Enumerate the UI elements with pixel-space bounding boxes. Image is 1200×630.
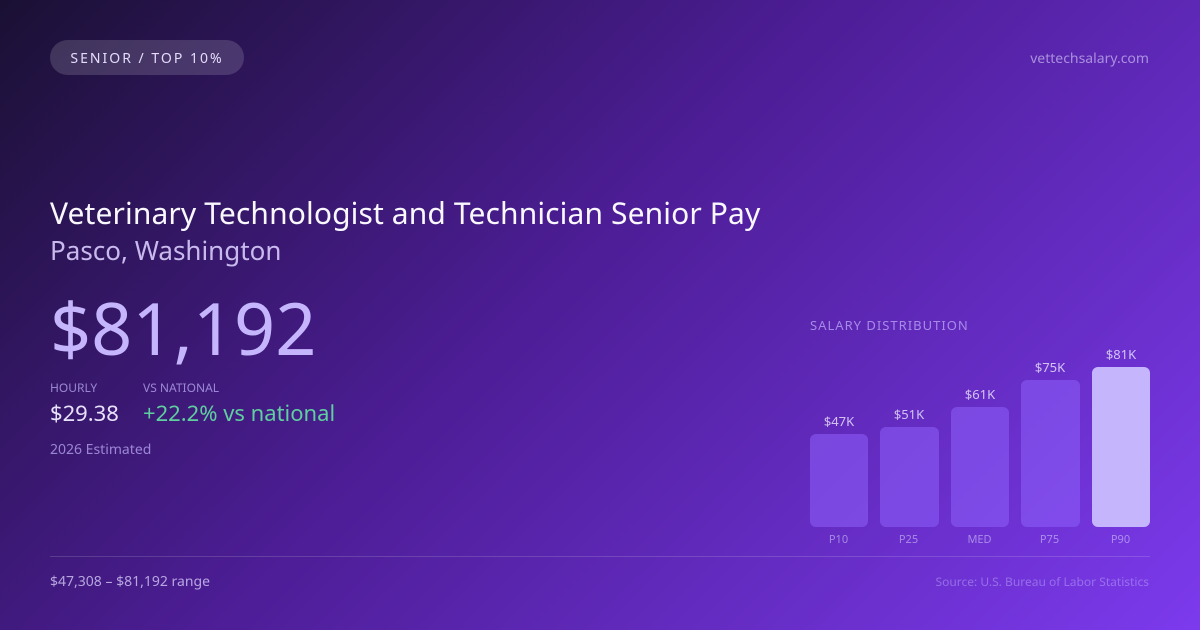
axis label: P10: P10 <box>829 532 848 547</box>
hourly value: $29.38 <box>50 398 119 428</box>
badge: senior / top 10% <box>50 40 244 75</box>
axis label: P25: P25 <box>899 532 918 547</box>
vs national label: VS NATIONAL <box>143 379 219 396</box>
bar: P75 <box>1021 380 1080 527</box>
title: Veterinary Technologist and Technician Senior Pay <box>50 192 760 233</box>
footer divider <box>50 556 1150 557</box>
chart: salary distribution <box>810 316 1150 547</box>
data year note: 2026 Estimated <box>50 440 151 459</box>
vs national value: +22.2% vs national <box>143 398 335 428</box>
axis label: median: MED <box>967 532 992 547</box>
stat: vs national <box>143 379 335 428</box>
subtitle: location: Pasco, Washington <box>50 232 281 268</box>
axis label: P75: P75 <box>1040 532 1059 547</box>
bar value: P90: $81K <box>1106 345 1136 363</box>
bar value: P10: $47K <box>824 412 854 430</box>
bar value: median: $61K <box>965 385 995 403</box>
data source: Source: U.S. Bureau of Labor Statistics <box>936 573 1149 590</box>
salary range: $47,308 – $81,192 range <box>50 572 210 591</box>
axis label: P90: P90 <box>1111 532 1130 547</box>
badge: senior / top 10%: SENIOR / TOP 10% <box>70 49 224 68</box>
bar: P25 <box>880 427 939 527</box>
bar: median <box>951 407 1009 527</box>
stat: hourly <box>50 379 119 428</box>
bar value: P75: $75K <box>1035 358 1065 376</box>
bar: P10 <box>810 434 868 527</box>
site domain: vettechsalary.com <box>1030 49 1149 68</box>
hourly label: HOURLY <box>50 379 97 396</box>
chart heading: SALARY DISTRIBUTION <box>810 316 969 334</box>
main salary figure: $81,192 <box>50 279 316 377</box>
bar: P90 highlighted <box>1092 367 1150 527</box>
bar value: P25: $51K <box>894 405 924 423</box>
